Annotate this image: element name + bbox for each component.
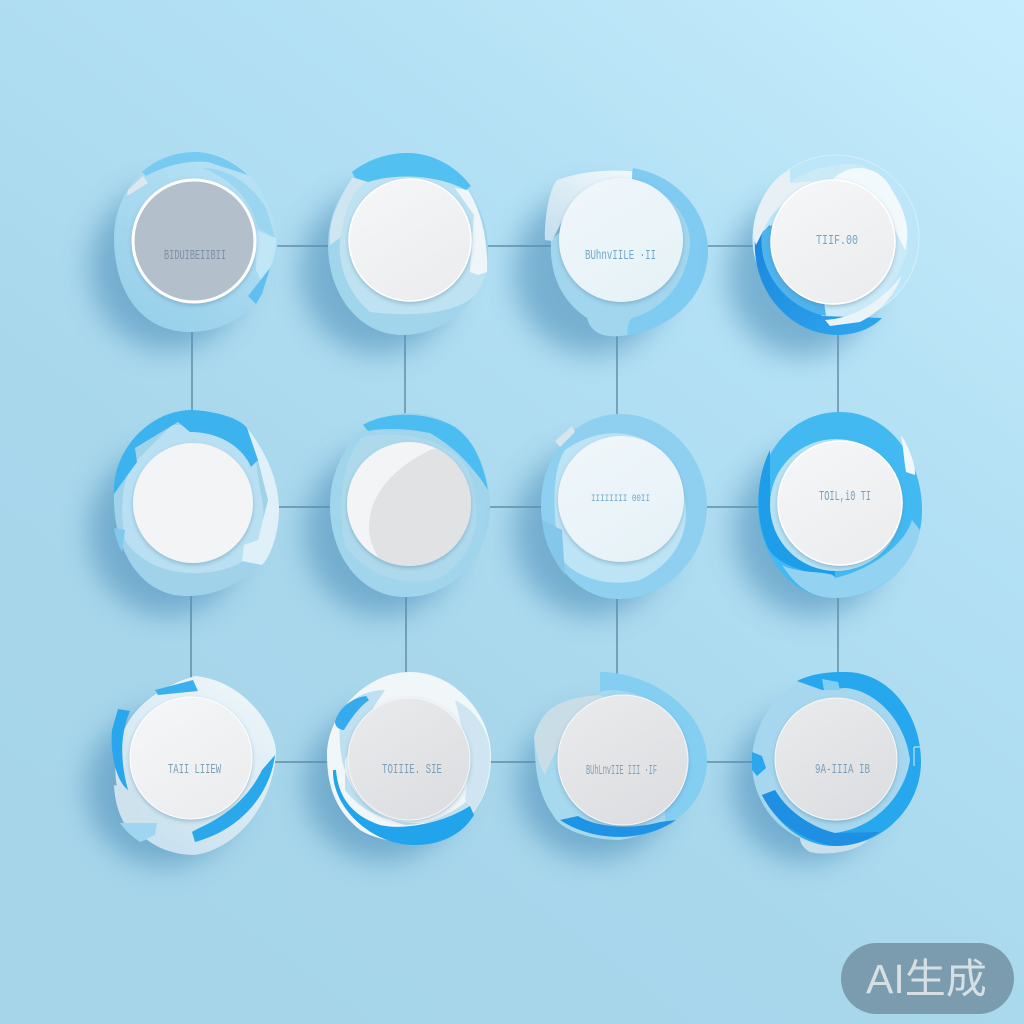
disc	[349, 179, 471, 301]
accent	[627, 168, 708, 335]
accent	[114, 410, 258, 494]
left grey panel	[114, 785, 157, 842]
label: BIDUIBEIIBII	[164, 248, 226, 264]
mid blue ring	[761, 225, 826, 316]
outer glass	[753, 155, 919, 321]
blue arc	[762, 672, 921, 846]
connector lines	[191, 246, 838, 762]
accents	[155, 680, 198, 695]
shell	[114, 152, 277, 332]
node row 3 column 2	[304, 672, 491, 861]
node row 1 column 3	[514, 168, 708, 354]
pale panel	[534, 695, 610, 775]
disc	[348, 698, 470, 820]
label: BUhnvIILE ·II	[585, 248, 656, 264]
shell	[551, 168, 708, 336]
shell	[752, 672, 921, 846]
disc	[346, 442, 472, 570]
disc	[133, 443, 253, 563]
node row 3 column 3: BUhLnvIIE III ·IF	[586, 763, 657, 779]
node row 2 column 4	[734, 412, 922, 616]
lower right light panel	[782, 520, 920, 598]
node row 1 column 2	[300, 153, 488, 354]
grey patch	[555, 426, 575, 447]
accents	[335, 696, 369, 730]
node row 2 column 3	[514, 414, 707, 616]
disc	[558, 695, 688, 825]
node row 2 column 1	[89, 410, 279, 616]
disc	[130, 697, 252, 819]
pale panel	[555, 433, 686, 583]
disc	[771, 180, 895, 304]
pale panels	[330, 178, 380, 245]
shell	[330, 413, 490, 597]
shell	[115, 676, 276, 855]
inner ring	[770, 439, 902, 571]
pale panel	[340, 690, 480, 825]
deep left band	[758, 450, 835, 578]
shell	[534, 672, 707, 840]
white strip	[914, 747, 920, 766]
label: TAII LIIEW	[168, 762, 221, 778]
label: TIIF.00	[816, 233, 858, 249]
accent	[363, 415, 488, 490]
shell	[758, 412, 922, 598]
node row 3 column 4	[732, 672, 921, 862]
node row 1 column 4	[728, 155, 919, 356]
deep accent	[762, 790, 880, 846]
disc	[133, 180, 255, 302]
node row 2 column 2	[304, 413, 490, 616]
shell	[328, 153, 488, 335]
label: TOIIIE. SIE	[382, 762, 442, 778]
pale panels	[753, 170, 830, 245]
left lower band	[542, 520, 565, 575]
disc	[559, 178, 683, 302]
disc	[775, 698, 897, 820]
shell	[327, 672, 491, 842]
inner panel	[122, 425, 264, 573]
left tab	[114, 528, 125, 552]
label: TOIL,i0 TI	[819, 489, 871, 505]
disc shaded area	[369, 448, 471, 566]
disc	[778, 441, 902, 565]
AI badge: AI生成	[866, 956, 987, 1002]
label: 9A-IIIA IB	[815, 762, 870, 778]
white strip	[901, 435, 915, 475]
pale tab	[545, 171, 632, 241]
pale panel	[341, 435, 476, 582]
deep blue crescent	[755, 225, 882, 335]
disc	[558, 436, 684, 562]
node row 3 column 3	[517, 672, 707, 859]
tab	[822, 679, 840, 690]
shell	[114, 410, 279, 596]
accent	[600, 672, 707, 825]
right pale panel	[242, 428, 279, 565]
node row 3 column 1	[86, 676, 276, 866]
lower tab	[800, 838, 870, 853]
accent	[142, 152, 248, 176]
accent	[352, 153, 471, 190]
right glass panel	[790, 164, 908, 325]
shell	[541, 414, 707, 599]
label: IIIIIIII 00II	[591, 494, 650, 505]
node row 1 column 1	[90, 152, 277, 350]
AI badge	[841, 943, 1014, 1014]
